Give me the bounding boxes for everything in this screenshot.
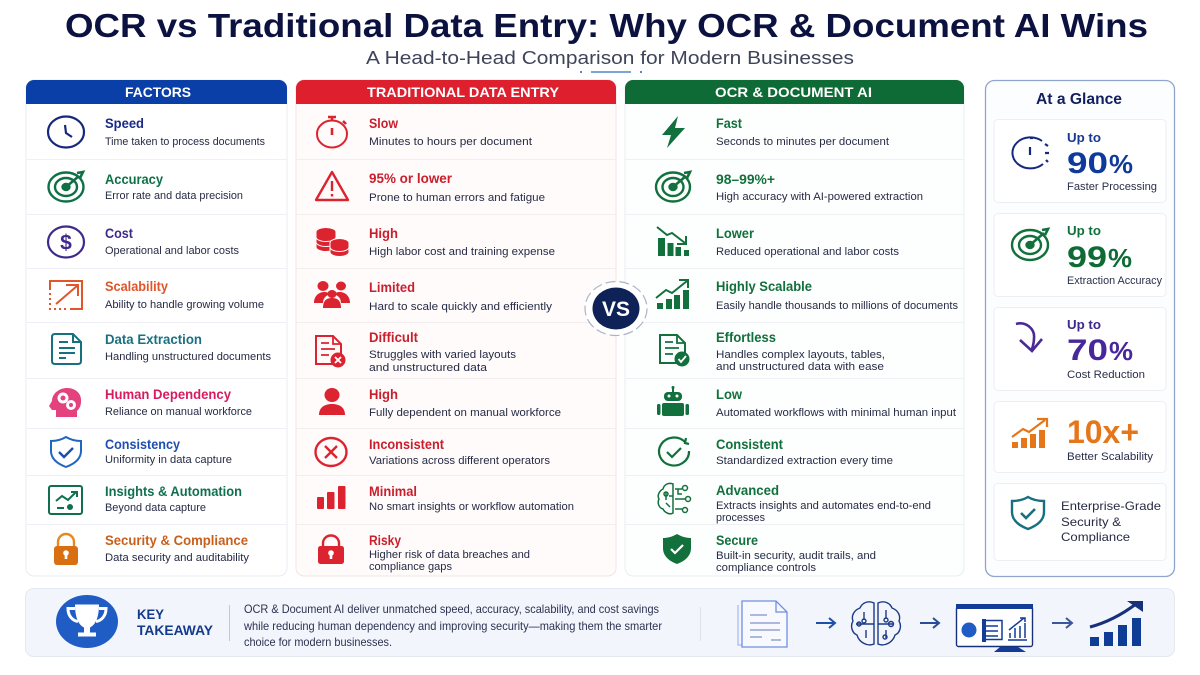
panel: ocr and document ai [625,80,964,576]
row: scalability: Scalability [105,279,168,294]
row: accuracy: Accuracy [105,172,163,187]
row: consistent: Standardized extraction every time [716,455,893,467]
row: secure: Built-in security, audit trails, and [716,550,876,562]
panel: traditional data entry: TRADITIONAL DATA ENTRY [367,84,560,100]
row: advanced [658,483,931,524]
row: minimal: Minimal [369,484,417,499]
row: security and compliance [54,533,250,565]
card: extraction accuracy: Up to [1067,223,1101,238]
takeaway text: OCR & Document AI deliver unmatched speed, accuracy, scalability, and cost savings [244,602,659,616]
card: faster processing: % [1109,149,1133,179]
row: consistency: Uniformity in data capture [105,454,232,466]
icon: x in circle [316,438,346,466]
panel: factors: FACTORS [125,84,191,100]
row: 95% or lower: 95% or lower [369,171,453,186]
row: high cost: High [369,226,398,241]
takeaway text: while reducing human dependency and improving security—making them the smarter [243,619,662,633]
row: data extraction: Data Extraction [105,332,202,347]
icon: group of people [314,281,350,308]
arrow [920,618,939,628]
card: enterprise security: Compliance [1061,530,1130,544]
panel: traditional data entry [296,80,616,576]
row: accuracy: Error rate and data precision [105,190,243,202]
icon: document [52,334,81,364]
row: insights and automation [49,484,242,514]
card: extraction accuracy: 99 [1067,241,1107,274]
icon: timer [1012,137,1049,168]
icon: circuit brain [658,483,690,514]
icon: target [1012,229,1048,260]
row: highly scalable: Highly Scalable [716,279,812,294]
icon: head with gears [49,388,81,417]
row: high dependency: Fully dependent on manual workforce [369,407,561,419]
row: accuracy 98-99% [656,172,923,203]
row: effortless: Handles complex layouts, tables, [716,349,885,361]
row: consistency [51,437,232,467]
row: difficult: and unstructured data [369,362,488,374]
row: inconsistent [316,437,551,467]
card: cost reduction [994,308,1166,390]
row: risky [318,533,530,573]
row: high cost [316,226,555,258]
panel: at a glance [986,80,1174,576]
vs badge: VS [602,298,630,321]
icon: document with x [316,336,346,368]
row: data extraction: Handling unstructured documents [105,351,272,363]
icon: coins [316,228,349,256]
card: faster processing: Faster Processing [1067,181,1157,193]
row: difficult: Struggles with varied layouts [369,349,517,361]
row: scalability [50,279,264,311]
panel: ocr and document ai: OCR & DOCUMENT AI [715,84,872,100]
row: high dependency: High [369,387,398,402]
row: consistent [659,437,893,467]
vs badge [585,282,647,336]
row: low dependency: Low [716,387,742,402]
row: cost: Operational and labor costs [105,245,239,257]
row: limited [314,280,553,313]
row: highly scalable: Easily handle thousands to millions of documents [716,300,958,312]
card: enterprise security [994,484,1166,560]
row: consistency: Consistency [105,437,180,452]
icon: person [319,388,345,415]
row: accuracy 98-99%: 98–99%+ [716,172,775,187]
icon: monitor dashboard [956,604,1033,652]
icon: filled shield [663,534,691,564]
row: fast: Fast [716,116,742,131]
row: minimal [317,484,574,513]
row: secure [663,533,876,574]
icon: dollar [48,226,84,258]
card: extraction accuracy [994,214,1166,296]
icon: robot [657,386,689,416]
row: minimal: No smart insights or workflow automation [369,501,574,513]
row: low dependency [657,386,956,419]
card: better scalability [994,402,1166,472]
icon: trophy [56,595,118,648]
row: secure: Secure [716,533,758,548]
row: fast [662,116,889,148]
panel: factors [26,80,287,576]
row: limited: Limited [369,280,415,295]
row: difficult: Difficult [369,330,418,345]
icon: warning triangle [316,172,348,200]
row: speed [48,116,265,148]
row: advanced: Advanced [716,483,779,498]
row: highly scalable [656,279,958,312]
arrow [1052,618,1072,628]
card: better scalability: Better Scalability [1067,451,1154,463]
row: difficult [316,330,517,374]
row: effortless [660,330,885,373]
card: enterprise security: Security & [1061,515,1121,529]
row: lower cost [657,226,899,258]
row: 95% or lower [316,171,545,204]
row: cost: Cost [105,226,133,241]
key takeaway label: KEY [137,606,165,622]
row: speed: Speed [105,116,144,131]
row: effortless: and unstructured data with ease [716,361,884,373]
subtitle: A Head-to-Head Comparison for Modern Businesses [366,47,854,68]
icon: document [738,601,787,647]
takeaway text: choice for modern businesses. [244,635,392,649]
icon: target [656,172,690,202]
row: lower cost: Reduced operational and labor costs [716,246,899,258]
row: security and compliance: Data security and auditability [105,552,250,564]
icon: stopwatch [317,117,347,148]
row: scalability: Ability to handle growing volume [105,299,264,311]
icon: declining bars [657,227,689,256]
row: limited: Hard to scale quickly and efficiently [369,301,553,313]
row: high cost: High labor cost and training expense [369,246,555,258]
row: high dependency [319,387,561,419]
row: slow: Slow [369,116,398,131]
row: inconsistent: Variations across different operators [369,455,551,467]
row: cost [48,226,239,258]
icon: teal shield [1012,497,1044,529]
takeaway text [243,602,662,649]
icon: shield check [51,437,81,467]
icon: growth bars [656,280,689,309]
arrow [816,618,835,628]
icon: document with check [660,335,690,366]
card: enterprise security: Enterprise-Grade [1061,499,1161,513]
panel: at a glance: At a Glance [1036,91,1122,108]
card: extraction accuracy: % [1108,243,1132,273]
row: advanced: Extracts insights and automates end-to-end [716,500,931,512]
row: slow [317,116,532,148]
row: low dependency: Automated workflows with minimal human input [716,407,956,419]
icon: orange growth bars [1012,419,1047,448]
row: effortless: Effortless [716,330,776,345]
icon: dollar: $ [60,232,72,254]
card: faster processing [994,120,1166,202]
card: cost reduction: % [1109,336,1133,366]
icon: red padlock [318,536,344,564]
row: advanced: processes [716,512,765,524]
row: consistent: Consistent [716,437,783,452]
icon: expand arrow [50,281,82,309]
card: extraction accuracy: Extraction Accuracy [1067,275,1162,287]
card: better scalability: 10x+ [1067,414,1139,450]
row: 95% or lower: Prone to human errors and fatigue [369,192,545,204]
row: risky: Higher risk of data breaches and [369,549,530,561]
key takeaway label: TAKEAWAY [137,622,214,638]
icon: curved down arrow [1016,323,1042,351]
key takeaway label [137,606,214,638]
card: faster processing: 90 [1067,147,1108,180]
row: human dependency [49,387,252,418]
row: risky: Risky [369,533,401,548]
card: cost reduction: Up to [1067,317,1101,332]
card: faster processing: Up to [1067,130,1101,145]
icon: circle check [659,438,689,466]
title: OCR vs Traditional Data Entry: Why OCR & Document AI Wins [65,7,1148,44]
row: slow: Minutes to hours per document [369,136,532,148]
icon: growth chart [1090,601,1143,646]
row: accuracy [48,172,243,202]
row: human dependency: Human Dependency [105,387,231,402]
row: fast: Seconds to minutes per document [716,136,889,148]
row: insights and automation: Beyond data capture [105,502,206,514]
icon: lightning bolt [662,116,685,148]
row: inconsistent: Inconsistent [369,437,444,452]
row: accuracy 98-99%: High accuracy with AI-powered extraction [716,191,923,203]
row: data extraction [52,332,272,364]
icon: clock [48,116,84,148]
row: lower cost: Lower [716,226,755,241]
card: cost reduction: Cost Reduction [1067,369,1145,381]
icon: brain [852,602,900,645]
row: risky: compliance gaps [369,561,452,573]
key takeaway bar [26,588,1174,656]
icon: bars [317,486,346,509]
card: cost reduction: 70 [1067,334,1108,367]
row: speed: Time taken to process documents [105,136,265,148]
icon: target [48,172,84,202]
row: insights and automation: Insights & Automation [105,484,242,499]
row: human dependency: Reliance on manual workforce [105,406,252,418]
icon: padlock [54,534,78,565]
row: security and compliance: Security & Compliance [105,533,248,548]
row: secure: compliance controls [716,562,817,574]
icon: chart board [49,486,82,514]
